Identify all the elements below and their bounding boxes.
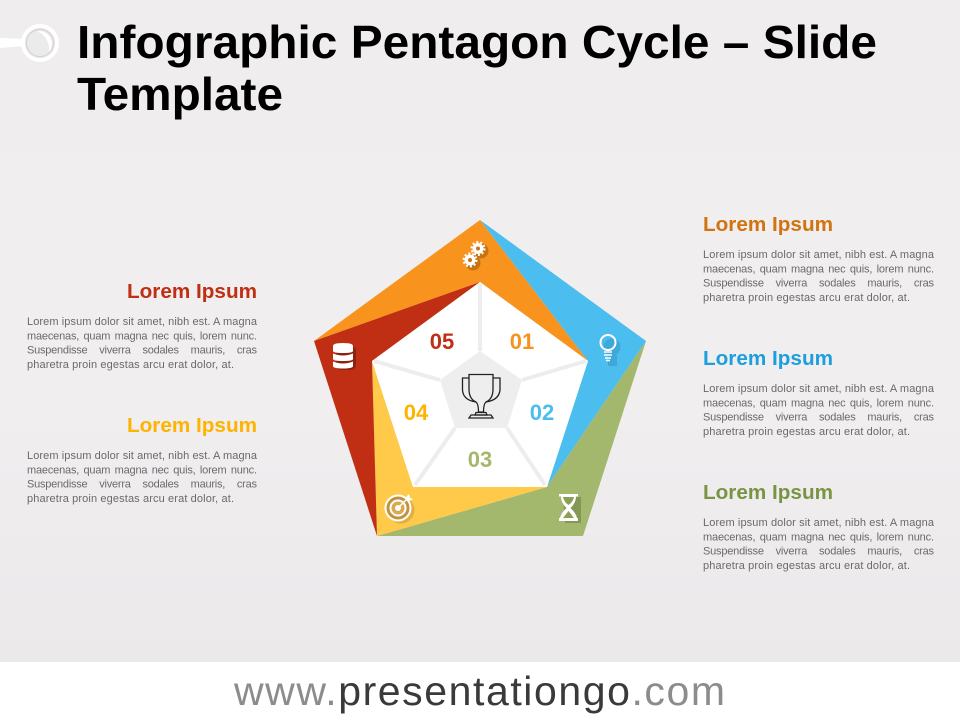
segment: green: [377, 341, 646, 536]
heading: Lorem Ipsum: [703, 214, 833, 236]
text block: left 1: [27, 281, 258, 371]
body: pharetra proin egestas arcu erat dolor, at.: [27, 493, 234, 505]
text block: right 1: [703, 214, 935, 304]
segment: blue: [480, 220, 646, 487]
inner white pentagon: [372, 282, 588, 487]
body: maecenas, quam magna nec quis, lorem nunc.: [703, 398, 934, 410]
icon: target: [386, 494, 414, 524]
body: Suspendisse viverra sodales mauris, cras: [27, 478, 258, 490]
body: [703, 249, 935, 304]
segment: red: [314, 282, 480, 536]
body: Suspendisse viverra sodales mauris, cras: [703, 412, 934, 424]
body: maecenas, quam magna nec quis, lorem nunc.: [703, 532, 934, 544]
icon: pin ring at title: [0, 26, 57, 60]
icon: database: [333, 343, 356, 370]
body: [703, 517, 935, 572]
number 02: 02: [530, 400, 554, 425]
segment: orange: [314, 220, 588, 361]
body: Lorem ipsum dolor sit amet, nibh est. A magna: [27, 450, 258, 462]
title: Infographic Pentagon Cycle – Slide: [77, 16, 877, 68]
footer url: www.presentationgo.com: [233, 668, 725, 714]
body: Suspendisse viverra sodales mauris, cras: [703, 278, 934, 290]
icon: trophy: [462, 374, 500, 418]
heading: Lorem Ipsum: [127, 281, 257, 303]
number 04: 04: [404, 400, 429, 425]
text block: left 2: [27, 415, 258, 505]
title: [77, 16, 877, 120]
body: [703, 383, 935, 438]
body: Suspendisse viverra sodales mauris, cras: [27, 344, 258, 356]
icon: gears: [464, 242, 488, 270]
number 03: 03: [468, 447, 492, 472]
body: Lorem ipsum dolor sit amet, nibh est. A magna: [703, 517, 935, 529]
title: Template: [77, 68, 283, 120]
heading: Lorem Ipsum: [703, 482, 833, 504]
body: maecenas, quam magna nec quis, lorem nunc.: [703, 264, 934, 276]
body: Lorem ipsum dolor sit amet, nibh est. A magna: [27, 316, 258, 328]
icon: light bulb: [600, 335, 620, 366]
text block: right 2: [703, 348, 935, 438]
number 01: 01: [510, 329, 534, 354]
body: Suspendisse viverra sodales mauris, cras: [703, 546, 934, 558]
icon: hourglass: [559, 494, 581, 523]
center pentagon: [440, 351, 522, 428]
body: [27, 450, 258, 505]
footer band: [0, 662, 960, 720]
body: Lorem ipsum dolor sit amet, nibh est. A magna: [703, 249, 935, 261]
segment: yellow: [372, 361, 547, 536]
number 05: 05: [430, 329, 454, 354]
body: pharetra proin egestas arcu erat dolor, at.: [27, 359, 234, 371]
body: Lorem ipsum dolor sit amet, nibh est. A magna: [703, 383, 935, 395]
heading: Lorem Ipsum: [703, 348, 833, 370]
body: pharetra proin egestas arcu erat dolor, at.: [703, 292, 910, 304]
pentagon cycle diagram: [314, 220, 646, 536]
body: maecenas, quam magna nec quis, lorem nunc.: [27, 464, 257, 476]
body: maecenas, quam magna nec quis, lorem nunc.: [27, 330, 257, 342]
body: [27, 316, 258, 371]
body: pharetra proin egestas arcu erat dolor, at.: [703, 426, 910, 438]
text block: right 3: [703, 482, 935, 572]
heading: Lorem Ipsum: [127, 415, 257, 437]
body: pharetra proin egestas arcu erat dolor, at.: [703, 560, 910, 572]
